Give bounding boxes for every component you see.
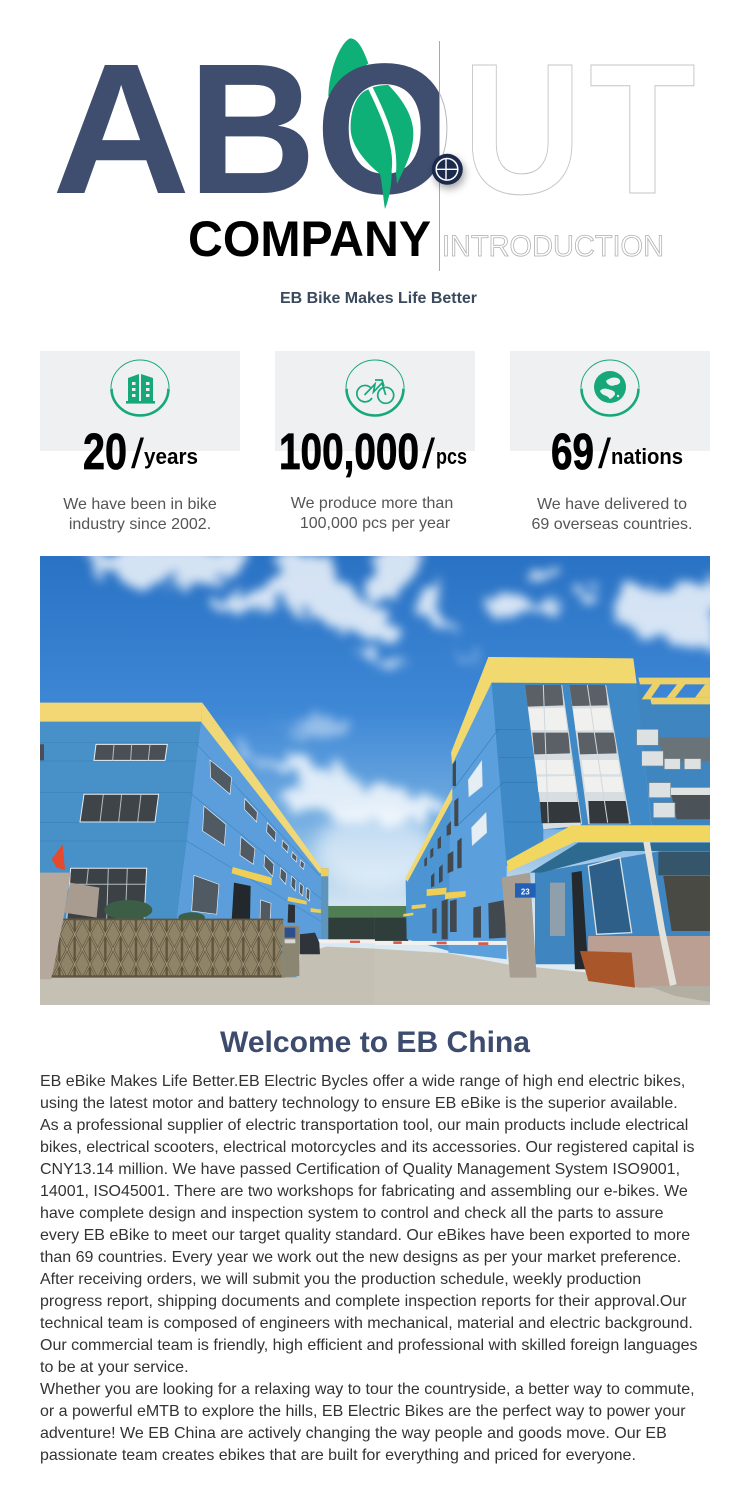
- far trees and wall: [327, 906, 375, 918]
- card background: [275, 351, 475, 451]
- flag: [52, 844, 65, 870]
- body text: 14001, ISO45001. There are two workshops for fabricating and assembling our e-bikes. We: [40, 1183, 688, 1200]
- canopy: [507, 825, 710, 872]
- roof band side: [201, 703, 328, 877]
- vertical divider: [438, 41, 440, 271]
- far side wall: [406, 803, 450, 951]
- stripe columns: [525, 685, 581, 829]
- icon: EB badge: [432, 154, 463, 185]
- curb: [648, 986, 710, 1002]
- body text: progress report, shipping documents and complete inspection reports for their approval.Our: [40, 1293, 687, 1310]
- car: [300, 933, 320, 954]
- body text: every EB eBike to meet our target quality standard. Our eBikes have been exported to more: [40, 1227, 690, 1244]
- description: [63, 496, 217, 533]
- number 69: 69: [551, 423, 594, 480]
- number sign: [515, 883, 536, 898]
- roof: [451, 657, 637, 764]
- icon: globe: [581, 360, 639, 416]
- panel: nations: [510, 351, 710, 533]
- icon: back leaf: [328, 38, 368, 97]
- subtitle: COMPANY: COMPANY: [188, 211, 431, 267]
- right building: [375, 657, 710, 1006]
- body text: bikes, electrical scooters, electrical motorcycles and its accessories. Our registered capital is: [40, 1139, 694, 1156]
- right wing: [637, 683, 710, 826]
- body text: passionate team creates ebikes that are built for everything and priced for everyone.: [40, 1447, 636, 1464]
- body text: than 69 countries. Every year we work out the new designs as per your market preference.: [40, 1249, 681, 1266]
- door and canopies: [232, 883, 251, 921]
- gate pillar: [502, 873, 537, 978]
- far trees and wall: [375, 906, 408, 918]
- near side wall: [448, 683, 507, 959]
- sky: [40, 556, 710, 1005]
- bench: [580, 951, 635, 988]
- front wall: [492, 683, 652, 866]
- photo: factory buildings: [40, 549, 717, 1006]
- barrier: [375, 941, 507, 945]
- body text: After receiving orders, we will submit you the production schedule, weekly production: [40, 1271, 641, 1288]
- body text: Whether you are looking for a relaxing way to tour the countryside, a better way to commute,: [40, 1381, 695, 1398]
- description: We have delivered to: [537, 496, 687, 513]
- panel: years: [40, 351, 240, 533]
- unit: pcs: [436, 444, 467, 469]
- dark panes: [525, 685, 617, 754]
- card background: [510, 351, 710, 451]
- body text: Our commercial team is friendly, high efficient and professional with skilled foreign languages: [40, 1337, 698, 1354]
- side wall: [173, 722, 327, 978]
- small canopies: [403, 888, 466, 917]
- icon: bicycle: [346, 360, 404, 416]
- left building: [40, 703, 375, 1006]
- icon: building: [111, 360, 169, 415]
- description: 100,000 pcs per year: [300, 515, 451, 532]
- card background: [40, 351, 240, 451]
- body text: have complete design and inspection system to control and check all the parts to assure: [40, 1205, 664, 1222]
- centre window: [588, 858, 632, 934]
- pillar: [40, 873, 71, 979]
- door: [572, 871, 588, 969]
- letter B: B: [188, 24, 316, 233]
- description: [291, 495, 453, 532]
- ground: [375, 949, 710, 1006]
- letter T outline: T: [589, 26, 696, 233]
- roof band front: [40, 703, 202, 722]
- description: industry since 2002.: [69, 516, 211, 533]
- letter A: A: [52, 26, 190, 233]
- description: 69 overseas countries.: [532, 516, 692, 533]
- number 20: 20: [83, 423, 127, 480]
- slash: /: [422, 430, 435, 477]
- subtitle: INTRODUCTION: INTRODUCTION: [442, 230, 664, 263]
- air conditioners: [637, 729, 701, 818]
- body text: technical team is composed of engineers with mechanical, material and electric background.: [40, 1315, 693, 1332]
- body text: or a powerful eMTB to explore the hills, EB Electric Bikes are the perfect way to power your: [40, 1403, 686, 1420]
- ground: [40, 947, 375, 1006]
- title: ABOUT: [52, 24, 696, 271]
- body text: As a professional supplier of electric transportation tool, our main products include electrical: [40, 1117, 688, 1134]
- body text: using the latest motor and battery technology to ensure EB eBike is the superior available.: [40, 1095, 678, 1112]
- canopy underside: [530, 843, 710, 873]
- letter O outline half: O: [316, 25, 454, 233]
- side windows: [192, 760, 310, 923]
- description: We produce more than: [291, 495, 453, 512]
- stone base: [588, 936, 710, 989]
- front wall: [40, 722, 201, 978]
- gate: [52, 919, 283, 978]
- wall seam lines: [40, 743, 323, 923]
- tagline: EB Bike Makes Life Better: [280, 290, 477, 307]
- seams: [453, 729, 542, 828]
- description: We have been in bike: [63, 496, 217, 513]
- number 100,000: 100,000: [279, 423, 419, 480]
- barrier: [318, 939, 375, 943]
- body text: CNY13.14 million. We have passed Certification of Quality Management System ISO9001,: [40, 1161, 680, 1178]
- clouds: [80, 549, 717, 890]
- far stair tower: [321, 868, 328, 940]
- body text: [40, 1073, 698, 1464]
- icon: front leaf: [351, 85, 413, 209]
- number sign: 23: [521, 888, 530, 897]
- side windows: [468, 761, 487, 845]
- body text: adventure! We EB China are actively changing the way people and goods move. Our EB: [40, 1425, 667, 1442]
- palm: [104, 900, 152, 920]
- panel: pcs: [275, 351, 475, 532]
- unit: nations: [611, 444, 683, 469]
- heading: Welcome to EB China: [220, 1026, 530, 1059]
- right window: [663, 876, 710, 931]
- gate motor post: [282, 926, 299, 978]
- front windows: [67, 744, 167, 921]
- ground level wall: [535, 843, 710, 964]
- slash: /: [598, 430, 611, 477]
- letter U outline: U: [462, 26, 582, 233]
- drain pipe: [643, 842, 677, 986]
- pergola: [638, 678, 710, 704]
- description: [532, 496, 692, 533]
- body text: EB eBike Makes Life Better.EB Electric Bycles offer a wide range of high end electric bikes,: [40, 1073, 685, 1090]
- unit: years: [144, 444, 198, 469]
- letter O filled half: O: [316, 25, 454, 233]
- body text: to be at your service.: [40, 1359, 189, 1376]
- slash: /: [131, 430, 144, 477]
